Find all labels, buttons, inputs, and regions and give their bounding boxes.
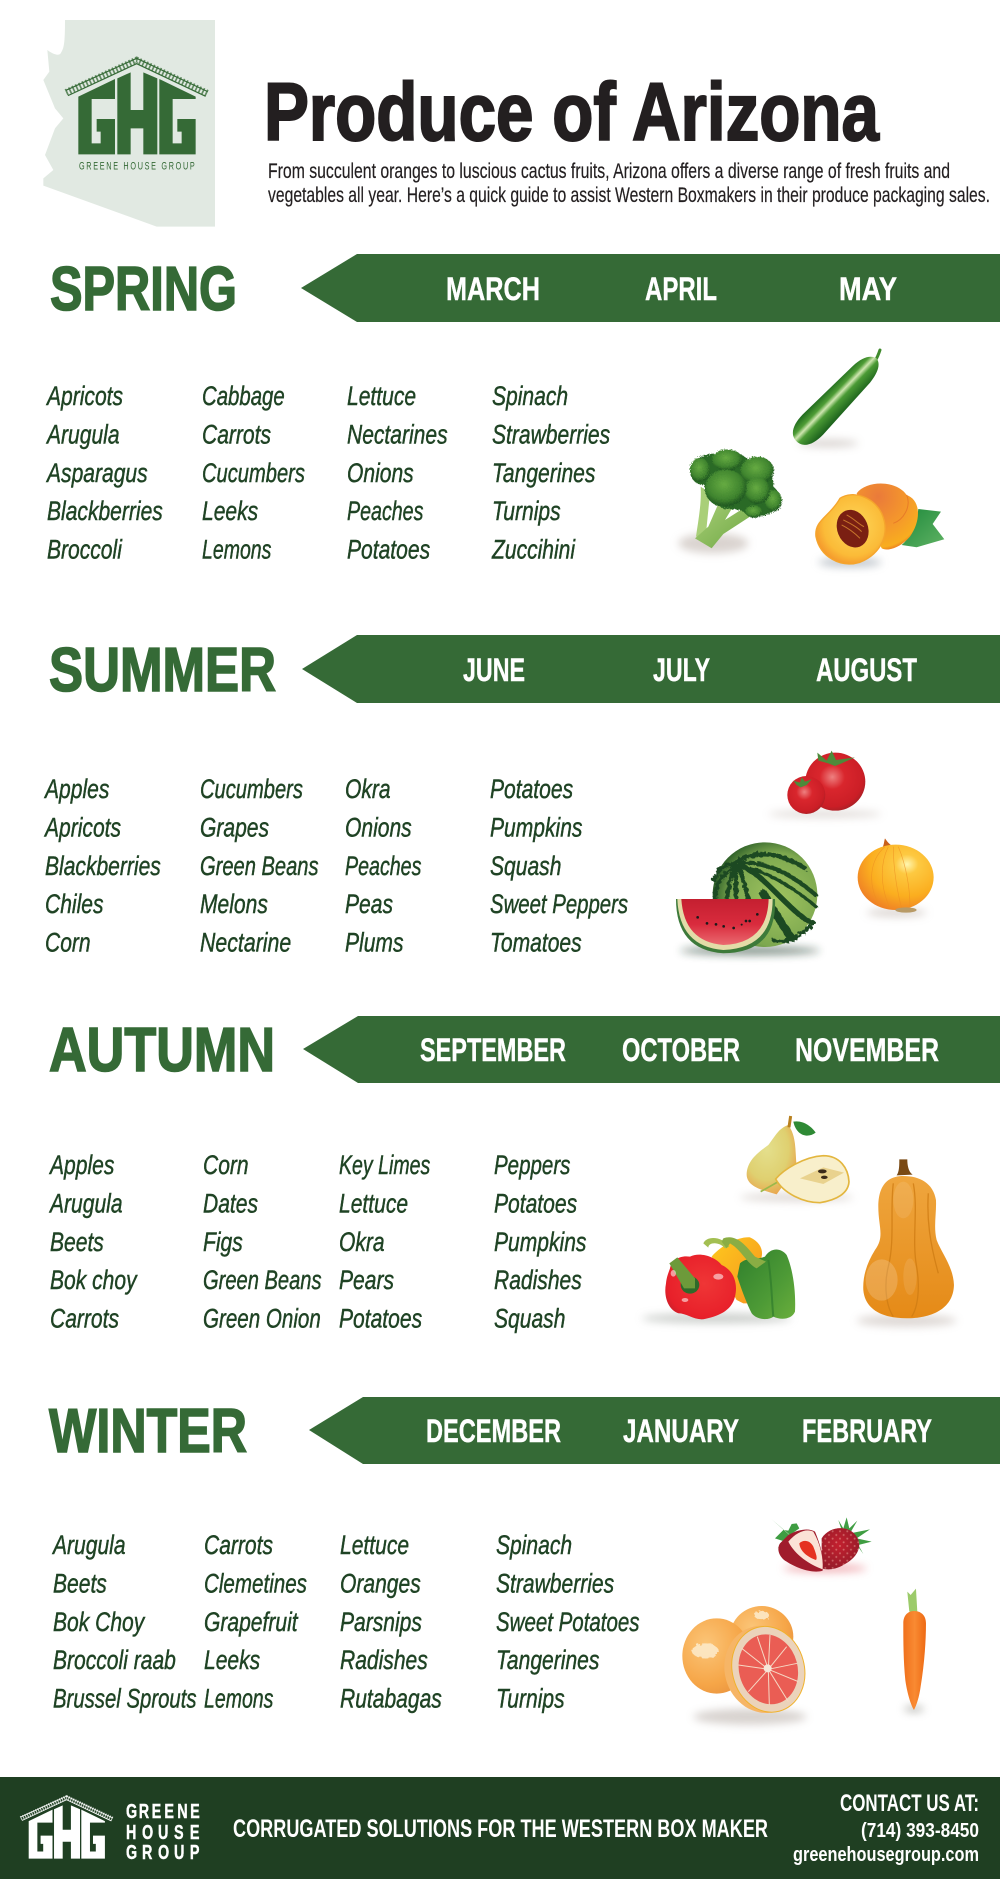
produce list: Okra xyxy=(345,775,391,805)
produce list: Arugula xyxy=(51,1531,126,1561)
produce list: Corn xyxy=(203,1151,249,1181)
produce illustrations xyxy=(676,751,934,955)
produce list: Blackberries xyxy=(47,497,163,527)
produce list: Apples xyxy=(48,1151,114,1181)
icon: pears xyxy=(740,1116,853,1203)
icon: strawberries xyxy=(772,1517,872,1572)
produce list: Potatoes xyxy=(347,535,430,565)
produce list: Bok choy xyxy=(50,1266,138,1296)
logo: Greene House Group: GREENE HOUSE GROUP xyxy=(79,160,195,172)
icon: grapefruit xyxy=(682,1606,814,1725)
icon: butternut squash xyxy=(857,1159,957,1327)
produce list: Pumpkins xyxy=(494,1227,586,1257)
produce list: Dates xyxy=(203,1189,258,1219)
produce list: Melons xyxy=(200,890,268,920)
month banner xyxy=(309,1397,1000,1464)
title: Produce of Arizona xyxy=(264,67,880,158)
section: spring xyxy=(45,254,1000,567)
produce list: Spinach xyxy=(496,1531,572,1561)
header xyxy=(43,20,990,227)
month banner: JANUARY xyxy=(623,1413,739,1449)
contact details: (714) 393-8450 xyxy=(861,1820,979,1842)
contact details xyxy=(793,1790,979,1866)
month banner: JUNE xyxy=(463,652,525,688)
produce list: Leeks xyxy=(204,1646,260,1676)
produce list: Beets xyxy=(53,1569,107,1599)
produce list xyxy=(48,1151,586,1334)
month banner: FEBRUARY xyxy=(802,1413,932,1449)
season heading: AUTUMN xyxy=(49,1016,275,1085)
produce list: Strawberries xyxy=(496,1569,614,1599)
icon: broccoli xyxy=(678,449,782,553)
produce list: Okra xyxy=(339,1227,385,1257)
produce list xyxy=(51,1531,640,1714)
produce list: Lettuce xyxy=(347,382,416,412)
produce list: Parsnips xyxy=(340,1607,422,1637)
produce list: Broccoli xyxy=(47,535,122,565)
produce list: Bok Choy xyxy=(53,1607,146,1637)
intro text xyxy=(268,160,990,207)
section: summer xyxy=(43,635,1000,958)
produce list: Tangerines xyxy=(492,458,595,488)
icon: carrot xyxy=(903,1589,926,1712)
produce list: Radishes xyxy=(494,1266,582,1296)
produce list: Beets xyxy=(50,1227,104,1257)
produce list: Radishes xyxy=(340,1646,428,1676)
footer company name: HOUSE xyxy=(126,1821,200,1844)
month banner: NOVEMBER xyxy=(795,1032,939,1068)
icon: peach xyxy=(816,484,944,567)
produce list: Squash xyxy=(490,851,561,881)
section: winter xyxy=(49,1397,1000,1725)
produce illustrations xyxy=(642,1116,957,1327)
produce illustrations xyxy=(678,349,944,567)
month banner xyxy=(302,635,1000,703)
produce list: Key Limes xyxy=(339,1151,430,1181)
produce list: Carrots xyxy=(50,1304,119,1334)
produce list: Nectarines xyxy=(347,420,448,450)
produce list: Clemetines xyxy=(204,1569,307,1599)
footer logo xyxy=(21,1796,113,1859)
produce list: Asparagus xyxy=(45,458,148,488)
produce list: Potatoes xyxy=(339,1304,422,1334)
produce list: Apples xyxy=(43,775,109,805)
produce list: Carrots xyxy=(202,420,271,450)
produce list: Peas xyxy=(345,890,393,920)
produce list: Brussel Sprouts xyxy=(53,1684,197,1714)
produce list xyxy=(43,775,628,958)
produce list: Lettuce xyxy=(339,1189,408,1219)
produce list: Strawberries xyxy=(492,420,610,450)
logo: Greene House Group xyxy=(66,58,208,172)
produce list: Tangerines xyxy=(496,1646,599,1676)
icon: tomatoes xyxy=(768,751,882,817)
month banner xyxy=(301,254,1000,322)
produce list: Plums xyxy=(345,928,403,958)
produce list: Peaches xyxy=(345,851,421,881)
produce list: Peppers xyxy=(494,1151,570,1181)
produce list: Cucumbers xyxy=(202,458,305,488)
footer company name: GREENE xyxy=(126,1800,200,1823)
produce list: Rutabagas xyxy=(340,1684,442,1714)
produce list: Zuccihini xyxy=(491,535,576,565)
produce list: Turnips xyxy=(496,1684,565,1714)
produce list: Arugula xyxy=(45,420,120,450)
season heading: WINTER xyxy=(49,1397,247,1466)
produce list: Spinach xyxy=(492,382,568,412)
produce list: Arugula xyxy=(48,1189,123,1219)
produce list: Broccoli raab xyxy=(53,1646,176,1676)
icon: bell peppers xyxy=(642,1237,795,1323)
produce list: Green Beans xyxy=(203,1266,322,1296)
footer tagline: CORRUGATED SOLUTIONS FOR THE WESTERN BOX MAKER xyxy=(233,1815,768,1843)
produce list: Nectarine xyxy=(200,928,291,958)
month banner: JULY xyxy=(653,652,710,688)
icon: watermelon xyxy=(676,842,820,955)
month banner: AUGUST xyxy=(816,652,917,688)
produce illustrations xyxy=(682,1517,926,1725)
icon: cucumber xyxy=(786,349,887,451)
month banner xyxy=(303,1016,1000,1083)
produce list: Sweet Potatoes xyxy=(496,1607,640,1637)
season heading: SUMMER xyxy=(49,636,276,705)
footer xyxy=(0,1777,1000,1879)
season heading: SPRING xyxy=(50,255,237,324)
produce list xyxy=(45,382,610,565)
footer company name: GROUP xyxy=(126,1841,200,1864)
produce list: Lemons xyxy=(202,535,271,565)
produce list: Squash xyxy=(494,1304,565,1334)
produce list: Lemons xyxy=(204,1684,273,1714)
produce list: Onions xyxy=(345,813,412,843)
produce list: Sweet Peppers xyxy=(490,890,628,920)
month banner: MAY xyxy=(839,271,897,307)
produce list: Turnips xyxy=(492,497,561,527)
section: autumn xyxy=(48,1016,1000,1334)
produce list: Cucumbers xyxy=(200,775,303,805)
produce list: Potatoes xyxy=(494,1189,577,1219)
produce list: Chiles xyxy=(45,890,104,920)
produce list: Onions xyxy=(347,458,414,488)
produce list: Potatoes xyxy=(490,775,573,805)
produce list: Green Beans xyxy=(200,851,319,881)
produce list: Figs xyxy=(203,1227,243,1257)
produce list: Lettuce xyxy=(340,1531,409,1561)
produce list: Peaches xyxy=(347,497,423,527)
produce list: Corn xyxy=(45,928,91,958)
month banner: OCTOBER xyxy=(622,1032,740,1068)
footer company name xyxy=(126,1800,200,1864)
produce list: Pears xyxy=(339,1266,394,1296)
produce list: Apricots xyxy=(45,382,123,412)
month banner: APRIL xyxy=(645,271,717,307)
produce list: Green Onion xyxy=(203,1304,321,1334)
produce list: Carrots xyxy=(204,1531,273,1561)
icon: onion xyxy=(858,838,934,917)
produce list: Cabbage xyxy=(202,382,285,412)
month banner: SEPTEMBER xyxy=(420,1032,566,1068)
produce list: Apricots xyxy=(43,813,121,843)
produce list: Blackberries xyxy=(45,851,161,881)
produce list: Pumpkins xyxy=(490,813,582,843)
arizona state shape xyxy=(43,20,215,227)
month banner: DECEMBER xyxy=(426,1413,561,1449)
produce list: Leeks xyxy=(202,497,258,527)
produce list: Grapes xyxy=(200,813,269,843)
month banner: MARCH xyxy=(446,271,540,307)
produce list: Grapefruit xyxy=(204,1607,299,1637)
produce list: Oranges xyxy=(340,1569,421,1599)
produce list: Tomatoes xyxy=(490,928,582,958)
